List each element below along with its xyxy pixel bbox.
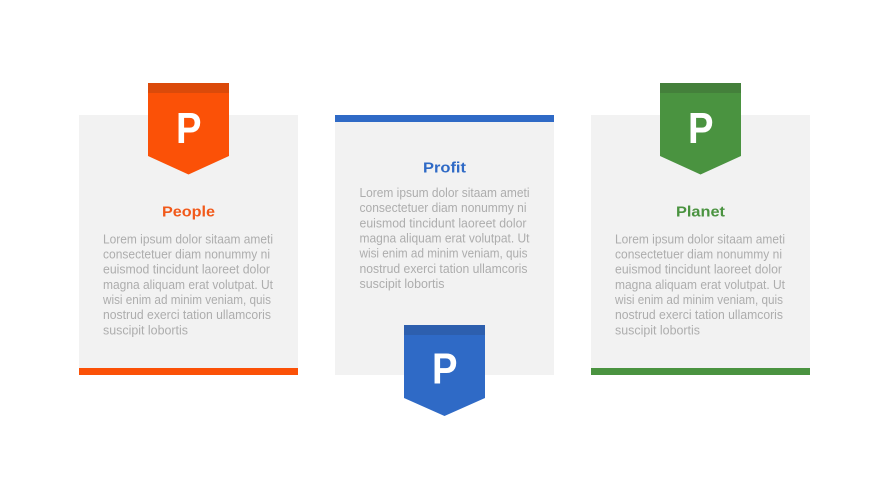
text block: profit: wisi enim ad minim veniam, quis xyxy=(359,246,528,261)
icon: planet badge: P xyxy=(688,105,714,153)
icon: people badge: P xyxy=(176,105,202,153)
text block: profit: Lorem ipsum dolor sitaam ameti xyxy=(360,185,530,200)
panel: planet xyxy=(591,83,810,375)
icon: people badge xyxy=(148,83,229,174)
text block: planet: magna aliquam erat volutpat. Ut xyxy=(615,277,785,292)
text block: profit: suscipit lobortis xyxy=(360,276,445,291)
text block: planet: euismod tincidunt laoreet dolor xyxy=(615,262,783,277)
text block: people: suscipit lobortis xyxy=(103,322,188,337)
panel: profit xyxy=(335,115,554,416)
text block: people: magna aliquam erat volutpat. Ut xyxy=(103,277,273,292)
text block: planet xyxy=(614,231,785,337)
icon: planet badge xyxy=(660,83,741,174)
text block: people: wisi enim ad minim veniam, quis xyxy=(102,292,271,307)
text block: people: Lorem ipsum dolor sitaam ameti xyxy=(103,231,273,246)
icon: profit badge xyxy=(404,325,485,416)
text block: people xyxy=(102,231,273,337)
text block: profit: nostrud exerci tation ullamcoris xyxy=(360,261,528,276)
text block: planet: Lorem ipsum dolor sitaam ameti xyxy=(615,231,785,246)
panel: people xyxy=(79,83,298,375)
text block: profit: consectetuer diam nonummy ni xyxy=(360,200,527,215)
text block: people: consectetuer diam nonummy ni xyxy=(103,246,270,262)
text block: profit: euismod tincidunt laoreet dolor xyxy=(360,215,527,230)
text block: people: nostrud exerci tation ullamcoris xyxy=(103,307,271,322)
text block: planet: suscipit lobortis xyxy=(615,322,700,337)
heading: profit: Profit xyxy=(423,160,466,176)
text block: planet: consectetuer diam nonummy ni xyxy=(615,246,782,262)
text block: planet: wisi enim ad minim veniam, quis xyxy=(614,292,783,307)
text block: planet: nostrud exerci tation ullamcoris xyxy=(615,307,783,322)
heading: planet: Planet xyxy=(676,204,725,220)
text block: profit xyxy=(359,185,530,291)
text block: profit: magna aliquam erat volutpat. Ut xyxy=(360,230,530,246)
icon: profit badge: P xyxy=(432,346,458,394)
heading: people: People xyxy=(162,204,215,220)
text block: people: euismod tincidunt laoreet dolor xyxy=(103,262,271,277)
